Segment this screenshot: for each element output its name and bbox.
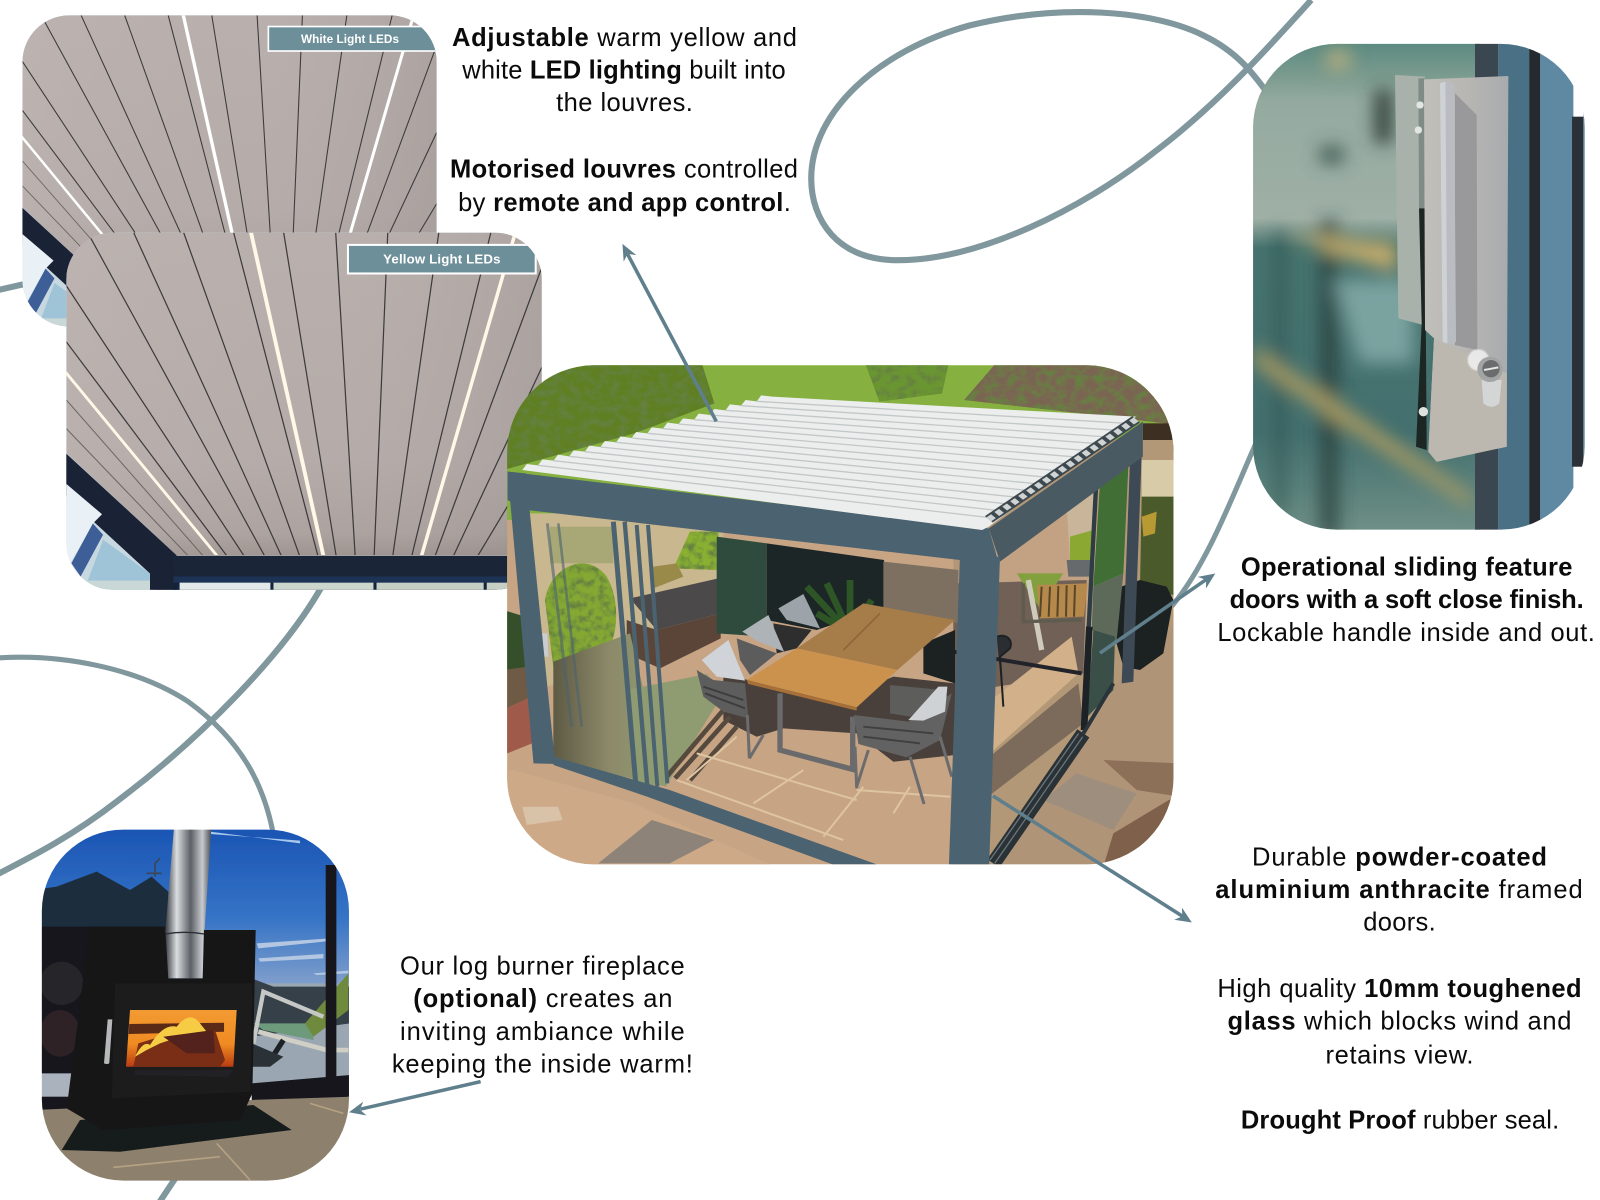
shadow on patio and mullion shadows [667, 630, 955, 780]
roof louvres [522, 395, 1136, 530]
door frame stripes [1475, 44, 1585, 530]
paving joints [677, 737, 950, 840]
text block: frame, glass and seal: High quality 10mm toughened [1217, 975, 1582, 1003]
arrow: door to sliding text [1100, 573, 1215, 653]
patio lounger outside [252, 973, 350, 1083]
arrow: log burner text to stove [349, 1082, 481, 1116]
frame: anthracite posts and beams [508, 422, 1143, 873]
rear chair and cushions [737, 594, 820, 675]
thatched roof silhouette and weathervane [33, 858, 168, 930]
stove body [67, 927, 256, 1130]
curved line: left stub [0, 283, 31, 291]
front right chair [854, 685, 952, 804]
curved line: lower left sweep [0, 582, 324, 876]
floor plate [62, 1105, 292, 1152]
photo: door handle [1253, 44, 1585, 530]
left garden and brick [503, 610, 536, 755]
curved line: bottom stub [158, 1173, 179, 1200]
photo: pergola main [491, 353, 1192, 873]
text block: frame, glass and seal: retains view. [1326, 1041, 1473, 1069]
text block: LED lighting and motorised louvres [450, 24, 798, 217]
text block: LED lighting and motorised louvres: the louvres. [556, 89, 693, 117]
label: White Light LEDs: White Light LEDs [301, 33, 399, 46]
text block: log burner: keeping the inside warm! [392, 1050, 693, 1078]
arrow: frame to glass text [993, 796, 1192, 922]
curved line: lower left loop [0, 657, 276, 847]
text block: frame, glass and seal: doors. [1363, 909, 1436, 937]
photo: log burner stove [33, 823, 360, 1187]
text block: sliding feature doors: Operational sliding feature [1241, 554, 1572, 582]
text block: log burner: Our log burner fireplace [400, 952, 685, 980]
window frame [33, 865, 350, 1113]
text block: frame, glass and seal: aluminium anthracite framed [1215, 876, 1583, 904]
arrow: roof to louvres text [622, 244, 716, 421]
text block: frame, glass and seal: Durable powder-coated [1252, 843, 1547, 871]
text block: sliding feature doors: doors with a soft close finish. [1230, 586, 1584, 614]
view through left glass [530, 513, 958, 787]
text block: frame, glass and seal: Drought Proof rubber seal. [1241, 1107, 1559, 1135]
stone floor [33, 1097, 350, 1187]
frame and louvred roof [508, 395, 1143, 873]
text block: LED lighting and motorised louvres: white LED lighting built into [461, 57, 786, 85]
label: Yellow Light LEDs [348, 245, 536, 273]
curved line: from door photo to main photo [1138, 434, 1260, 653]
dining table [747, 603, 955, 769]
front left chair [697, 640, 763, 758]
sliding door mullions [547, 522, 667, 787]
dark left side and bush [33, 927, 90, 1102]
interior, glass and furniture [503, 513, 958, 840]
blurred reflections on glass [1253, 44, 1480, 530]
text block: sliding feature doors: Lockable handle inside and out. [1217, 619, 1595, 647]
handle plates [1395, 75, 1508, 462]
text block: frame, glass and seal [1215, 843, 1583, 1135]
flue pipe [165, 823, 212, 978]
key cylinder lock [1468, 349, 1503, 407]
garden and thatch behind the pergola [491, 353, 1192, 873]
photo: white light LEDs ceiling [22, 15, 437, 326]
evening sky [45, 830, 349, 984]
text block: log burner: inviting ambiance while [400, 1018, 685, 1046]
text block: LED lighting and motorised louvres: Adjustable warm yellow and [452, 24, 797, 52]
label: White Light LEDs [268, 27, 444, 51]
text block: frame, glass and seal: glass which blocks wind and [1228, 1008, 1571, 1036]
text block: sliding feature doors [1217, 554, 1595, 647]
text block: log burner: (optional) creates an [413, 985, 672, 1013]
text block: LED lighting and motorised louvres: Motorised louvres controlled [450, 156, 798, 184]
plant in white pot [804, 580, 874, 626]
curved line: top right loop [811, 0, 1311, 260]
fire window [126, 1010, 237, 1077]
label: Yellow Light LEDs: Yellow Light LEDs [383, 251, 501, 266]
text block: log burner [392, 952, 693, 1078]
text block: LED lighting and motorised louvres: by remote and app control. [458, 189, 791, 217]
view right of the corner post [953, 440, 1180, 867]
photo: yellow light LEDs ceiling [66, 232, 542, 590]
